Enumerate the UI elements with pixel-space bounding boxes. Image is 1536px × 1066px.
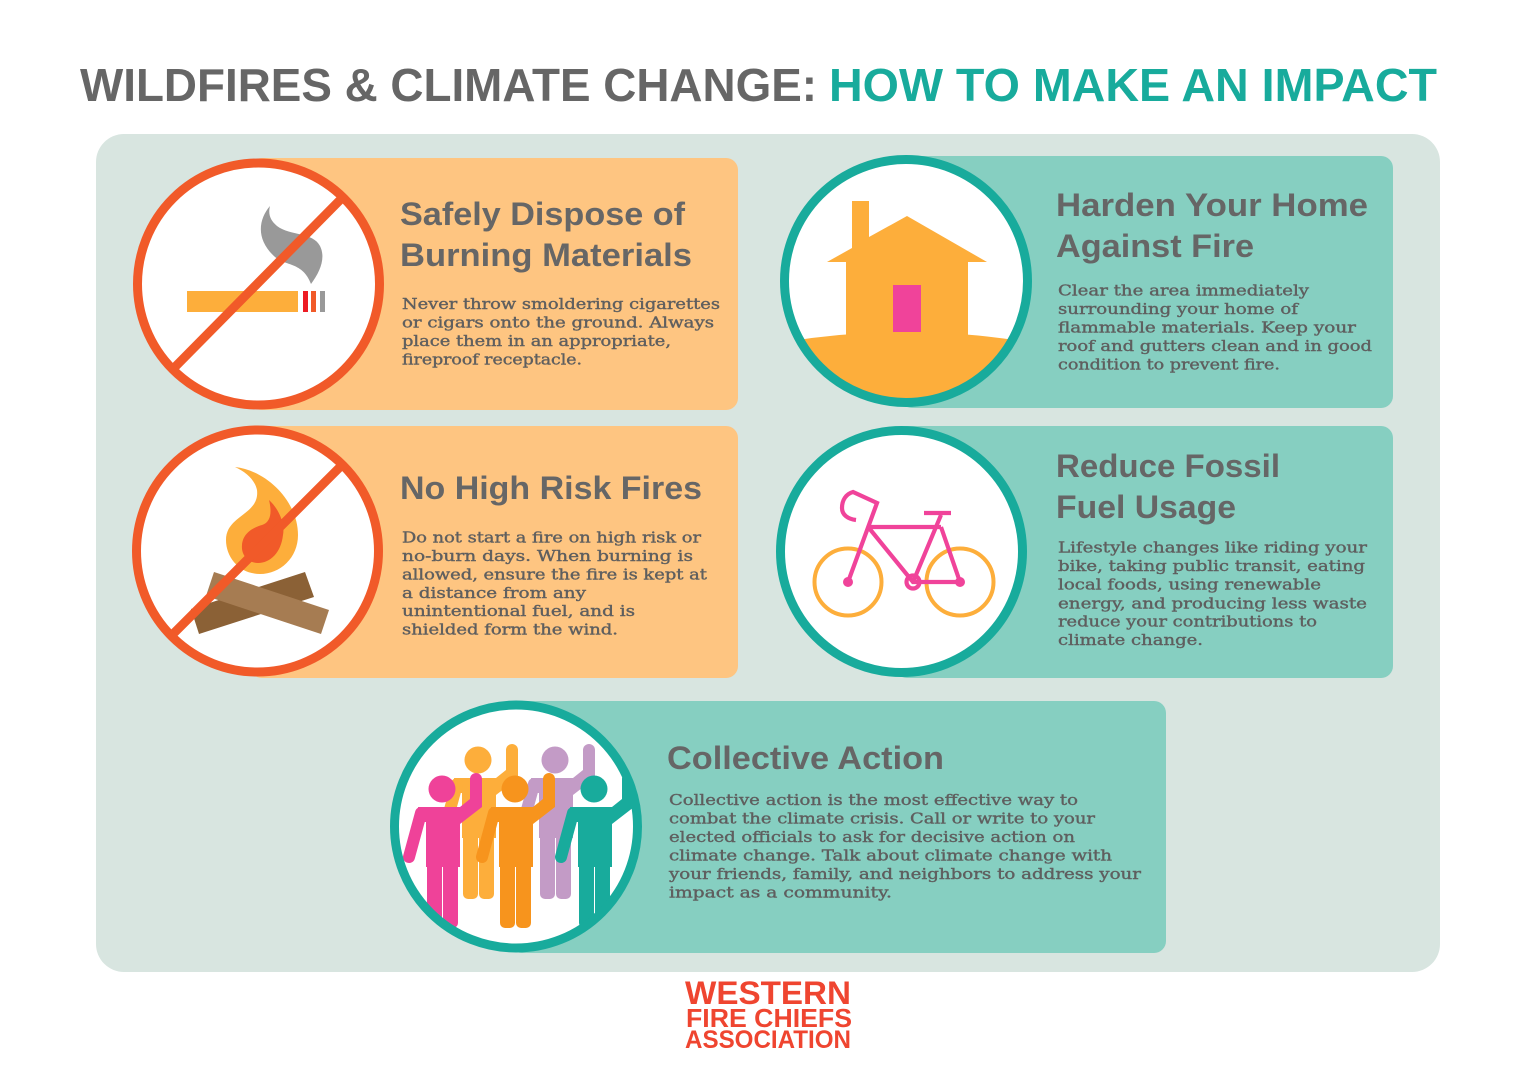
heading: reduce fossil fuel: Fuel Usage xyxy=(1056,489,1236,525)
heading: collective action: Collective Action xyxy=(667,740,944,776)
heading: reduce fossil fuel: Reduce Fossil xyxy=(1056,448,1280,484)
text: collective action: elected officials to ask for decisive action on xyxy=(669,828,1075,846)
text: harden your home: condition to prevent fire. xyxy=(1058,356,1280,374)
text: safely dispose: fireproof receptacle. xyxy=(402,350,582,368)
person: lavender xyxy=(522,744,595,894)
heading: reduce fossil fuel xyxy=(1056,448,1280,525)
text: harden your home: surrounding your home of xyxy=(1058,300,1300,318)
text: harden your home: Clear the area immediately xyxy=(1058,282,1310,300)
panel: collective action xyxy=(394,701,1166,953)
text: no high risk fires: no-burn days. When burning is xyxy=(402,547,693,565)
text: safely dispose: or cigars onto the ground. Always xyxy=(402,314,714,332)
text: harden your home: roof and gutters clean and in good xyxy=(1058,337,1372,355)
text: collective action: combat the climate crisis. Call or write to your xyxy=(669,810,1096,828)
text: reduce fossil fuel: Lifestyle changes like riding your xyxy=(1058,538,1368,556)
text: reduce fossil fuel xyxy=(1058,538,1368,649)
heading: safely dispose: Safely Dispose of xyxy=(400,196,685,232)
panel: no high risk fires xyxy=(136,426,738,678)
text: safely dispose: Never throw smoldering cigarettes xyxy=(402,295,720,313)
text: reduce fossil fuel: bike, taking public transit, eating xyxy=(1058,557,1365,575)
person: teal xyxy=(561,773,634,923)
text: collective action: your friends, family, and neighbors to address your xyxy=(668,865,1142,883)
heading: harden your home: Against Fire xyxy=(1056,228,1254,264)
background panel xyxy=(96,134,1440,972)
text: collective action: impact as a community. xyxy=(669,884,892,902)
icon: no smoking xyxy=(138,163,380,405)
text: collective action: climate change. Talk about climate change with xyxy=(669,846,1112,864)
text: safely dispose xyxy=(402,295,720,368)
text: no high risk fires: Do not start a fire on high risk or xyxy=(402,528,702,546)
text: no high risk fires: shielded form the wind. xyxy=(402,620,618,638)
panel: reduce fossil fuel xyxy=(780,426,1393,678)
title: WILDFIRES & CLIMATE CHANGE: xyxy=(80,59,817,111)
text: collective action: Collective action is the most effective way to xyxy=(669,791,1078,809)
heading: safely dispose xyxy=(400,196,692,273)
title: HOW TO MAKE AN IMPACT xyxy=(829,59,1437,111)
panel: safely dispose xyxy=(138,158,738,410)
title xyxy=(80,59,1437,111)
logo: Western Fire Chiefs Association: WESTERN xyxy=(685,975,851,1011)
logo: Western Fire Chiefs Association: ASSOCIATION xyxy=(685,1026,851,1054)
icon: group of people xyxy=(394,705,638,948)
person: yellow xyxy=(445,744,518,894)
icon: bicycle xyxy=(780,430,1022,672)
person: pink xyxy=(409,773,482,923)
text: harden your home xyxy=(1058,282,1372,374)
heading: safely dispose: Burning Materials xyxy=(400,237,692,273)
icon: house xyxy=(784,160,1028,420)
text: reduce fossil fuel: energy, and producing less waste xyxy=(1058,594,1367,612)
text: no high risk fires: a distance from any xyxy=(402,584,587,602)
heading: harden your home xyxy=(1056,187,1368,264)
text: reduce fossil fuel: reduce your contributions to xyxy=(1058,612,1317,630)
heading: no high risk fires: No High Risk Fires xyxy=(400,470,702,506)
panel: harden your home xyxy=(784,156,1393,420)
text: reduce fossil fuel: local foods, using renewable xyxy=(1058,576,1321,594)
text: reduce fossil fuel: climate change. xyxy=(1058,631,1203,649)
text: harden your home: flammable materials. Keep your xyxy=(1058,318,1357,336)
logo: Western Fire Chiefs Association xyxy=(685,975,852,1054)
logo: Western Fire Chiefs Association: FIRE CHIEFS xyxy=(686,1003,852,1033)
text: no high risk fires xyxy=(402,528,707,638)
text: no high risk fires: unintentional fuel, and is xyxy=(402,602,635,620)
person: orange xyxy=(482,773,555,923)
icon: no campfire xyxy=(136,430,378,672)
text: collective action xyxy=(668,791,1142,902)
text: safely dispose: place them in an appropriate, xyxy=(402,332,671,350)
text: no high risk fires: allowed, ensure the fire is kept at xyxy=(402,566,707,584)
heading: harden your home: Harden Your Home xyxy=(1056,187,1368,223)
